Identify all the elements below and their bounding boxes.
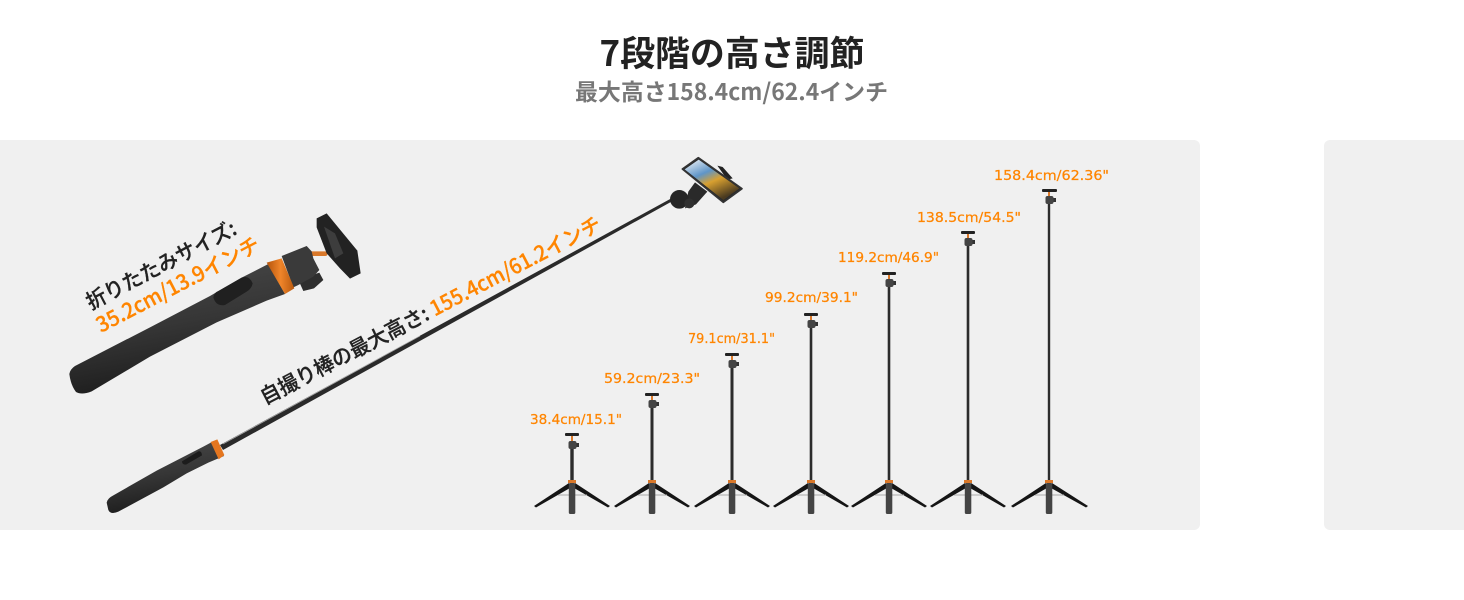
tripod 138.5: [930, 231, 1006, 514]
panel: next slide edge: [1324, 140, 1464, 530]
stick shaft: [220, 198, 674, 450]
tripod 99.2: [773, 313, 849, 514]
tripod 79.1: [694, 353, 770, 514]
folded handle body: [69, 264, 285, 394]
tripod 158.4: [1011, 189, 1088, 514]
folded selfie stick: [69, 213, 361, 394]
bracket: [685, 182, 707, 208]
tripod label 59.2: 59.2cm/23.3": [604, 371, 700, 387]
stick highlight: [223, 336, 420, 444]
knob: [684, 198, 694, 208]
handle and ring: [107, 439, 224, 513]
title: 7段階の高さ調節: [600, 26, 864, 77]
head and phone: [670, 158, 742, 209]
tripod label 38.4: 38.4cm/15.1": [530, 412, 622, 428]
phone: [682, 158, 742, 202]
folded knob: [298, 273, 323, 291]
orange ring: [211, 439, 224, 459]
folded handle button: [213, 277, 253, 305]
folded size label: [80, 213, 265, 339]
tripod label 158.4: 158.4cm/62.36": [994, 168, 1109, 184]
folded collar: [267, 258, 294, 294]
panel: main background: [0, 140, 1200, 530]
handle body: [107, 442, 224, 513]
folded label line 1: 折りたたみサイズ:: [80, 213, 241, 316]
tripod label 79.1: 79.1cm/31.1": [688, 331, 775, 347]
tripod label 119.2: 119.2cm/46.9": [838, 250, 939, 266]
phone screen: [685, 160, 739, 200]
tripod 119.2: [851, 272, 927, 514]
subtitle: 最大高さ158.4cm/62.4インチ: [575, 73, 888, 107]
folded phone plate: [317, 213, 361, 279]
ball head: [670, 190, 689, 209]
tripod 59.2: [614, 393, 690, 514]
selfie stick label: 自撮り棒の最大高さ: 155.4cm/61.2インチ: [254, 209, 606, 411]
folded label line 2: 35.2cm/13.9インチ: [90, 229, 265, 339]
folded plate detail: [324, 227, 343, 258]
folded ball head: [282, 246, 319, 287]
handle button: [182, 451, 202, 465]
tripod label 138.5: 138.5cm/54.5": [917, 210, 1021, 226]
extended selfie stick: [107, 158, 742, 513]
folded orange stem: [307, 251, 327, 256]
clamp: [717, 166, 733, 180]
tripod 38.4: [534, 433, 610, 514]
tripod label 99.2: 99.2cm/39.1": [765, 290, 858, 306]
